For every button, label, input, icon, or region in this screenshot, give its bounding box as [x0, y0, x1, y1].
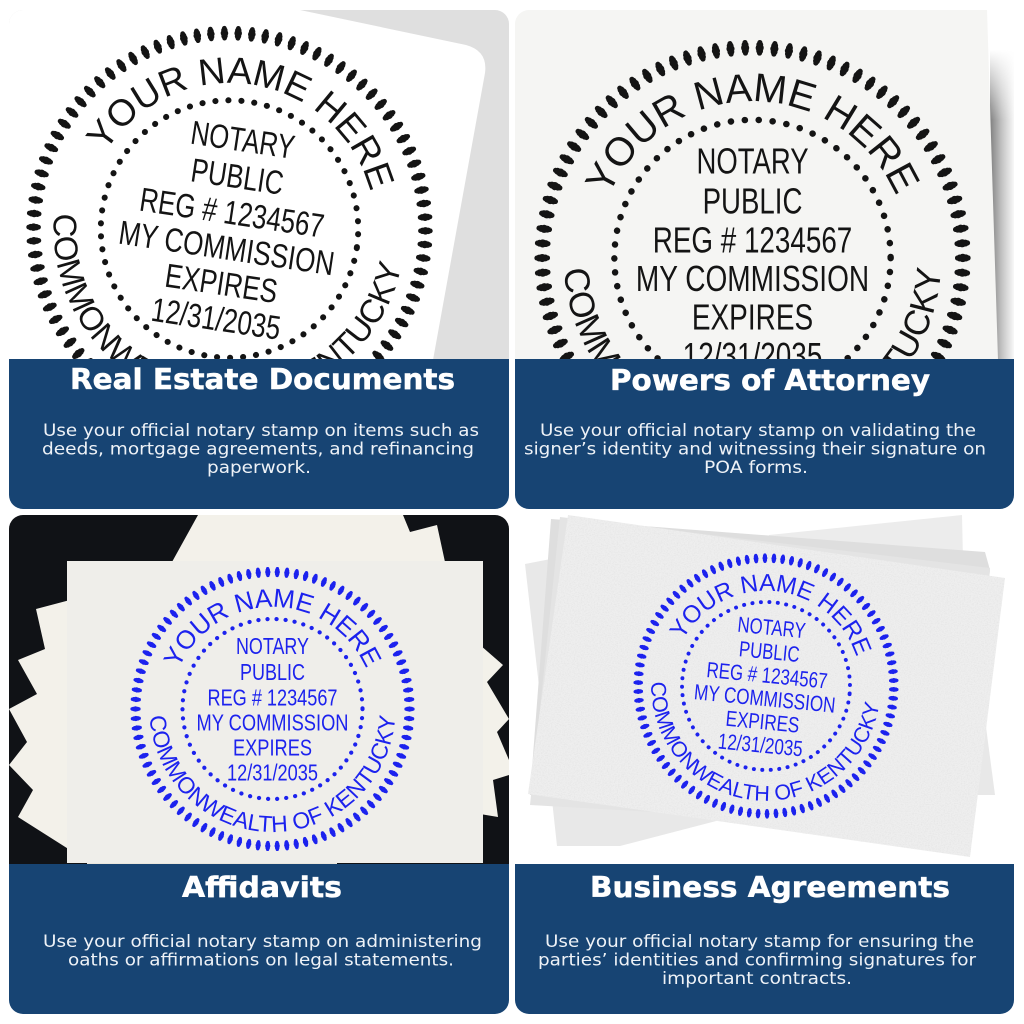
banner: business agreements: Use your official notary stamp for ensuring the: [545, 932, 974, 951]
panel: powers of attorney: [515, 10, 1014, 509]
stamp: blue notary seal: NOTARY: [737, 612, 807, 643]
photo: off-white paper with shadow: [515, 10, 1014, 360]
stamp: black notary seal: EXPIRES: [163, 258, 280, 311]
photo: stack of textured white sheets: [515, 515, 1014, 865]
stamp: black notary seal: 12/31/2035: [683, 335, 822, 376]
banner: powers of attorney: POA forms.: [704, 458, 808, 477]
stamp: blue notary seal: MY COMMISSION: [196, 710, 348, 736]
stamp: blue notary seal: PUBLIC: [738, 636, 801, 667]
banner: affidavits: Use your official notary stamp on administering: [43, 932, 482, 951]
panel: business agreements: [515, 515, 1014, 1014]
banner: business agreements: parties’ identities and confirming signatures for: [538, 950, 976, 970]
stamp: blue notary seal: EXPIRES: [725, 706, 800, 738]
stamp: black notary seal: MY COMMISSION: [636, 258, 869, 299]
stamp: black notary seal: YOUR NAME HERE: [85, 58, 394, 190]
banner: real estate documents: Real Estate Documents: [70, 363, 455, 396]
stamp: blue notary seal: EXPIRES: [233, 734, 312, 760]
stamp: black notary seal: REG # 1234567: [653, 220, 852, 261]
banner: powers of attorney: signer’s identity and witnessing their signature on: [524, 440, 986, 458]
banner: real estate documents: deeds, mortgage agreements, and refinancing: [42, 440, 474, 458]
banner: business agreements: [515, 864, 1014, 1014]
stamp: blue notary seal: MY COMMISSION: [693, 679, 837, 718]
stamp: blue notary seal: [634, 553, 898, 819]
stamp: blue notary seal: COMMONWEALTH OF KENTUCKY: [150, 714, 395, 832]
stamp: black notary seal: PUBLIC: [703, 180, 802, 221]
stamp: blue notary seal: YOUR NAME HERE: [668, 574, 872, 656]
banner: real estate documents: [9, 359, 509, 509]
stamp: black notary seal: [26, 26, 433, 359]
stamp: black notary seal: MY COMMISSION: [116, 215, 337, 283]
banner: affidavits: Affidavits: [182, 871, 342, 904]
banner: affidavits: oaths or affirmations on legal statements.: [68, 950, 454, 970]
stamp: black notary seal: COMMONWEALTH OF KENTUCKY: [53, 215, 400, 359]
stamp: black notary seal: REG # 1234567: [137, 182, 326, 246]
stamp: blue notary seal: REG # 1234567: [208, 684, 338, 710]
banner: business agreements: Business Agreements: [590, 871, 950, 904]
stamp: black notary seal: 12/31/2035: [149, 292, 283, 348]
stamp: blue notary seal: COMMONWEALTH OF KENTUCKY: [651, 682, 878, 801]
banner: powers of attorney: Use your official notary stamp on validating the: [540, 421, 976, 440]
stamp: blue notary seal: PUBLIC: [240, 659, 305, 685]
banner: powers of attorney: [515, 359, 1014, 509]
stamp: black notary seal: COMMONWEALTH OF KENTUCKY: [564, 267, 940, 359]
panel: real estate documents: [9, 10, 509, 509]
photo: fanned cream sheets on black: [9, 515, 509, 865]
banner: real estate documents: Use your official notary stamp on items such as: [43, 421, 479, 440]
banner: affidavits: [9, 864, 509, 1014]
banner: business agreements: important contracts.: [662, 969, 852, 988]
stamp: blue notary seal: 12/31/2035: [717, 728, 804, 761]
stamp: black notary seal: NOTARY: [696, 141, 809, 182]
stamp: blue notary seal: NOTARY: [236, 633, 309, 659]
stamp: blue notary seal: 12/31/2035: [227, 760, 318, 786]
stamp: black notary seal: PUBLIC: [188, 152, 286, 203]
banner: powers of attorney: Powers of Attorney: [610, 364, 930, 397]
stamp: black notary seal: NOTARY: [188, 115, 297, 167]
stamp: black notary seal: EXPIRES: [692, 296, 813, 337]
photo: white paper sheet on grey: [300, 10, 509, 359]
panel: affidavits: [9, 515, 509, 1014]
stamp: blue notary seal: YOUR NAME HERE: [163, 588, 382, 668]
stamp: blue notary seal: [130, 567, 415, 851]
stamp: blue notary seal: REG # 1234567: [705, 657, 829, 694]
banner: real estate documents: paperwork.: [207, 458, 311, 477]
stamp: black notary seal: YOUR NAME HERE: [584, 74, 920, 194]
stamp: black notary seal: [534, 40, 971, 359]
